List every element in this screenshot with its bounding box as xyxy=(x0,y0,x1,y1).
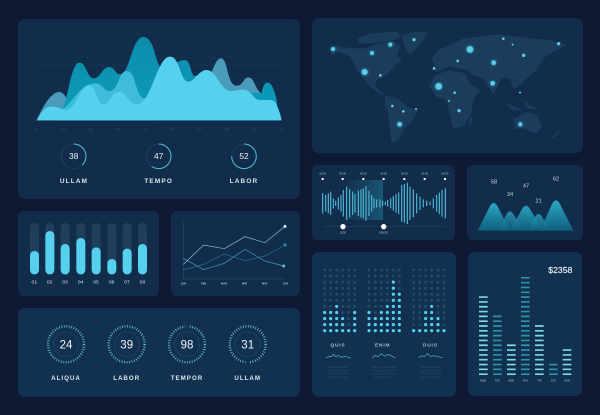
bar labels: 07 xyxy=(124,280,130,286)
amount: $2358 xyxy=(548,265,573,275)
dial: aliqua 24: 24 xyxy=(60,340,73,352)
value labels: 62 xyxy=(553,177,559,183)
area chart: 09 xyxy=(252,128,256,132)
bar labels: 04 xyxy=(78,280,84,286)
timeline slider xyxy=(324,224,445,235)
panel: dot matrix charts xyxy=(312,252,456,397)
time labels: 00:00 xyxy=(401,171,408,175)
description text: dolore eu fugiat xyxy=(421,375,441,379)
description text: in reprehenderit in xyxy=(373,368,396,372)
dial: tempor 98: 98 xyxy=(181,340,193,352)
time labels: 00:00 xyxy=(339,171,347,175)
area chart: 10 xyxy=(279,128,283,132)
panel: world map xyxy=(312,18,583,153)
bar labels: 01 xyxy=(32,280,37,286)
mountains xyxy=(478,200,573,231)
time labels xyxy=(319,171,449,175)
day labels: FRI xyxy=(537,379,542,382)
description text xyxy=(327,365,442,379)
time labels: 00:00 xyxy=(421,171,429,175)
month labels: MAY xyxy=(262,283,268,286)
dial: aliqua 24 xyxy=(48,326,84,382)
panel: segmented bar chart xyxy=(468,252,582,396)
value labels: 21 xyxy=(536,199,542,205)
bar labels xyxy=(32,280,145,286)
description text: velit esse cillum xyxy=(328,372,349,376)
line series xyxy=(183,226,285,270)
description text: dolore eu fugiat xyxy=(328,375,348,379)
time labels: 00:00 xyxy=(360,171,367,175)
timeline slider: 002030 xyxy=(379,231,389,235)
day labels: TUE xyxy=(495,379,500,382)
area chart: 04 xyxy=(116,128,120,132)
time labels: 00:00 xyxy=(380,171,388,175)
location markers xyxy=(330,37,560,127)
gauge: ullam 38 xyxy=(60,144,88,185)
waveform highlight xyxy=(343,180,383,220)
time dots xyxy=(321,178,446,180)
bar tracks xyxy=(30,223,147,274)
area chart xyxy=(34,37,283,132)
area chart: 06 xyxy=(170,128,174,132)
gauge: labor 52: 52 xyxy=(239,151,249,161)
area chart: 05 xyxy=(143,128,147,132)
bar labels: 05 xyxy=(93,280,99,286)
world map continents xyxy=(330,32,567,143)
month labels: APR xyxy=(242,283,247,286)
panel: area chart with ring gauges xyxy=(18,19,300,199)
description text: dolor reprehende xyxy=(420,368,442,372)
description text: Duis aute irure xyxy=(421,365,440,369)
time labels: 00:00 xyxy=(319,171,327,175)
day labels: WED xyxy=(508,379,514,382)
month labels: MAR xyxy=(221,283,227,286)
gauge: tempo 47: TEMPO xyxy=(144,178,173,185)
gauge: tempo 47 xyxy=(144,144,173,185)
month labels: FEB xyxy=(201,283,206,286)
dial: labor 39: LABOR xyxy=(113,375,140,382)
description text: voluptate velit esse xyxy=(372,372,396,376)
bar labels: 06 xyxy=(109,280,115,286)
group labels: QUIS xyxy=(330,343,346,349)
value labels: 58 xyxy=(491,179,497,185)
day labels: THU xyxy=(523,379,528,382)
gauge: labor 52 xyxy=(230,144,258,185)
day labels xyxy=(480,379,570,382)
gauge: labor 52: LABOR xyxy=(230,178,258,185)
area chart: 01 xyxy=(34,128,38,132)
waveform bars xyxy=(323,183,445,224)
day labels: SUN xyxy=(564,379,570,382)
bar labels: 08 xyxy=(140,280,145,286)
month labels xyxy=(181,283,288,286)
day labels: MON xyxy=(480,379,486,382)
dial: tempor 98 xyxy=(168,325,206,382)
gauge: tempo 47: 47 xyxy=(154,151,164,161)
highlighted dots xyxy=(325,282,444,331)
group labels: DUIS xyxy=(423,343,438,349)
dial: tempor 98: TEMPOR xyxy=(171,375,203,382)
bar labels: 03 xyxy=(62,280,68,286)
description text: Duis aute irure dolor xyxy=(371,365,397,369)
month labels: JAN xyxy=(181,283,186,286)
gauge: ullam 38: 38 xyxy=(69,151,79,161)
gauge: ullam 38: ULLAM xyxy=(60,178,88,185)
description text: Duis aute irure xyxy=(329,365,348,369)
teal segmented bars xyxy=(497,276,553,375)
timeline slider: 2020 xyxy=(340,231,346,235)
bar values xyxy=(30,231,147,274)
dial: ullam 31: ULLAM xyxy=(234,375,261,382)
panel: audio waveform timeline xyxy=(312,165,455,240)
description text: velit esse cillum xyxy=(421,372,441,376)
panel: vertical bars 01-08 xyxy=(18,211,159,296)
dial: ullam 31 xyxy=(228,325,267,382)
group labels xyxy=(330,343,438,349)
bar labels: 02 xyxy=(47,280,53,286)
value labels xyxy=(491,177,559,205)
time labels: 00:00 xyxy=(442,171,449,175)
area chart: 03 xyxy=(89,128,93,132)
month labels: JUN xyxy=(283,283,288,286)
description text: cillum dolore eu xyxy=(374,375,394,379)
panel: dial counters xyxy=(18,308,300,397)
area chart: 07 xyxy=(197,128,201,132)
value labels: 47 xyxy=(523,184,529,190)
dial: labor 39 xyxy=(109,326,145,382)
area chart: 08 xyxy=(225,128,229,132)
group labels: ENIM xyxy=(375,343,390,349)
dial: aliqua 24: ALIQUA xyxy=(51,375,81,382)
value labels: 34 xyxy=(507,192,513,198)
panel: line chart xyxy=(171,211,300,296)
day labels: SAT xyxy=(551,379,556,382)
light segmented bars xyxy=(483,295,567,375)
dial: labor 39: 39 xyxy=(120,340,133,352)
area chart: 02 xyxy=(61,128,65,132)
description text: dolor reprehende xyxy=(327,368,349,372)
dial: ullam 31: 31 xyxy=(241,340,254,352)
panel: mountain chart xyxy=(467,165,583,240)
sparklines xyxy=(326,354,443,358)
background dots xyxy=(325,270,444,331)
